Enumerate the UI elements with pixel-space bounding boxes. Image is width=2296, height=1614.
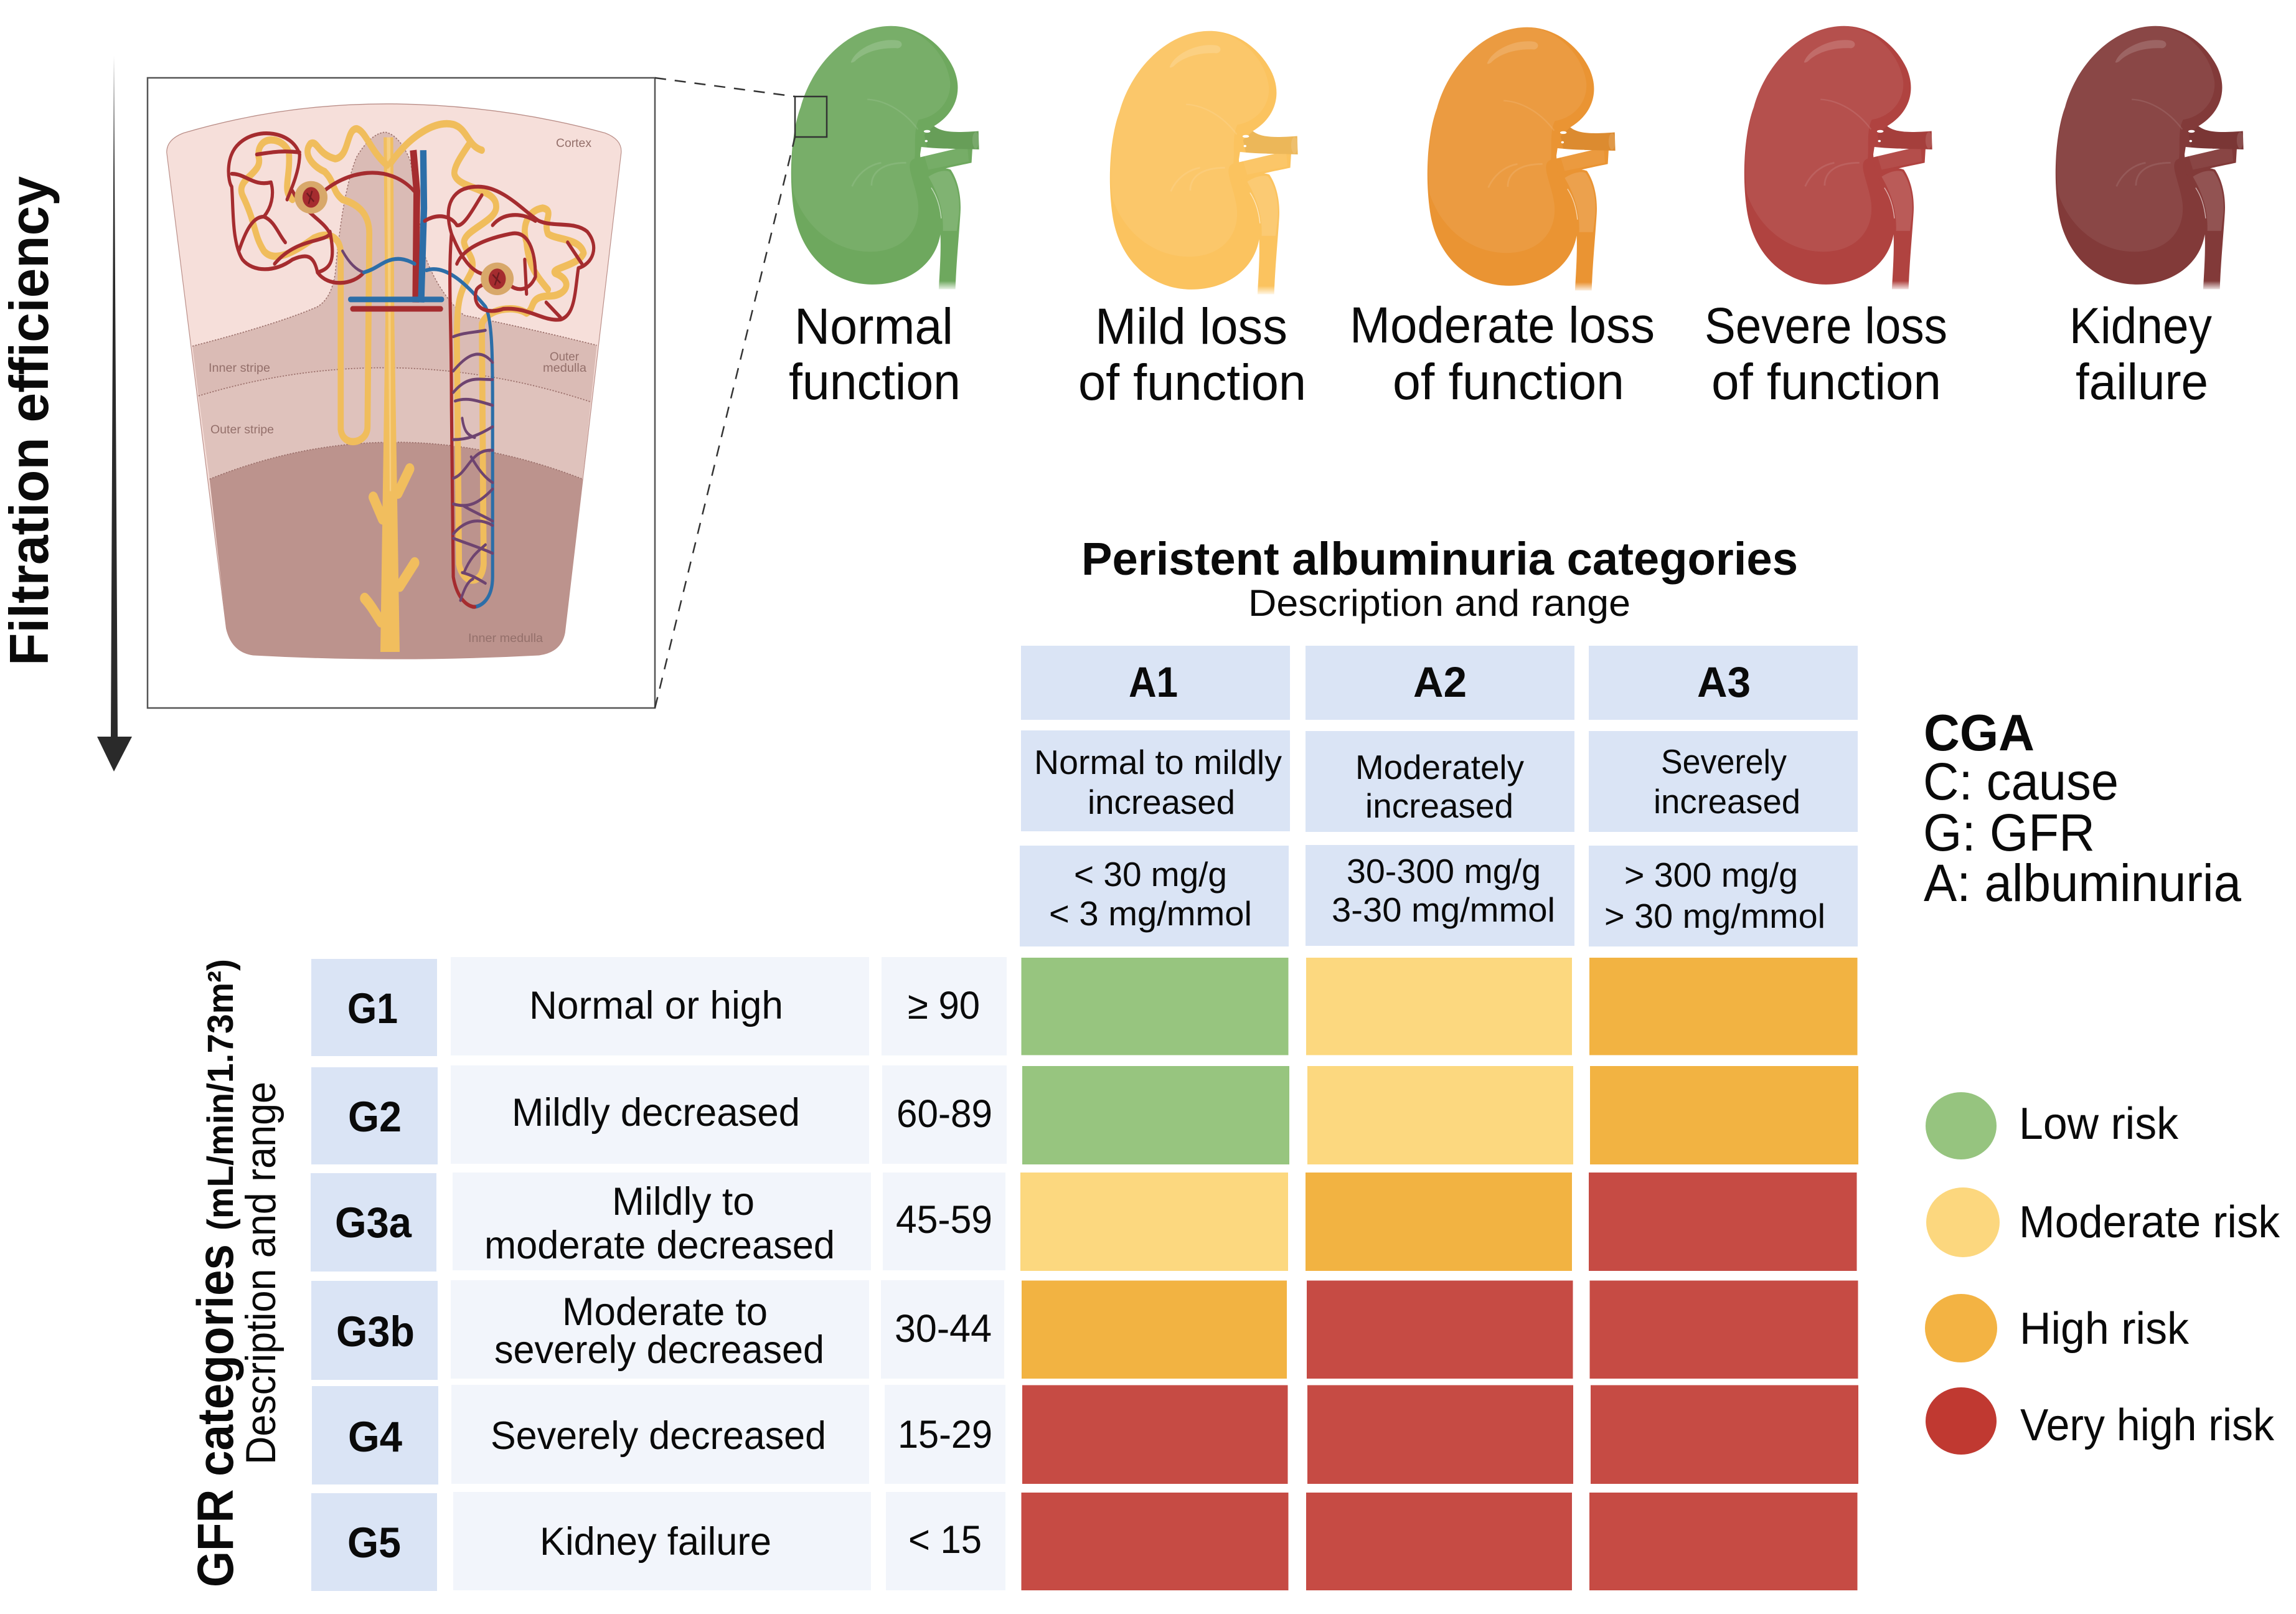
row G4: 15-29 <box>898 1413 992 1456</box>
column A3: > 300 mg/g <box>1624 856 1798 894</box>
row G3b: Moderate to <box>562 1290 768 1334</box>
legend: risk levels <box>1925 1092 2280 1455</box>
row G2 <box>311 1065 1007 1164</box>
GFR axis title: GFR categories <box>187 1244 244 1587</box>
row G3b: G3b <box>336 1308 415 1356</box>
row G2: 60-89 <box>896 1092 992 1136</box>
row G4: G4 <box>348 1413 402 1461</box>
kidney: kidney failure: Kidney <box>2069 298 2212 354</box>
row G5: G5 <box>347 1519 401 1567</box>
arrow: filtration efficiency decreasing downward <box>97 56 132 772</box>
zone labels: Inner stripe <box>209 362 270 375</box>
nephron illustration <box>167 104 621 659</box>
row G5 <box>311 1492 1005 1591</box>
kidney: moderate loss of function: of function <box>1393 354 1624 410</box>
heading: persistent albuminuria categories: Description and range <box>1248 582 1630 624</box>
column A2: Moderately <box>1355 748 1524 786</box>
legend item: low risk: Low risk <box>2019 1099 2179 1149</box>
legend item: high risk <box>1925 1294 2190 1362</box>
row G1: G1 <box>347 984 398 1032</box>
row G3a: G3a <box>335 1199 412 1247</box>
row G3a: 45-59 <box>896 1198 992 1242</box>
kidney: moderate loss of function: Moderate loss <box>1350 297 1655 354</box>
zone labels: Cortex <box>556 137 592 150</box>
legend item: moderate risk <box>1926 1187 2280 1257</box>
row G3b: severely decreased <box>494 1328 824 1372</box>
kidney: normal function <box>789 26 979 410</box>
row G1: ≥ 90 <box>908 984 980 1027</box>
row G2: Mildly decreased <box>512 1091 800 1135</box>
row G1: Normal or high <box>529 984 783 1027</box>
row G5: Kidney failure <box>540 1520 771 1564</box>
row G1 <box>311 957 1007 1056</box>
legend item: very high risk <box>1926 1387 2275 1455</box>
kidney: mild loss of function: Mild loss <box>1095 298 1287 355</box>
row G4: Severely decreased <box>491 1414 826 1458</box>
zone labels: medulla <box>543 362 586 375</box>
zoom marker on normal kidney <box>795 97 827 137</box>
row G5: < 15 <box>908 1518 982 1562</box>
column A2: 30-300 mg/g <box>1347 852 1541 890</box>
column A3: A3 <box>1697 658 1751 706</box>
row G3b: 30-44 <box>895 1307 992 1351</box>
kidney: mild loss of function <box>1078 31 1306 411</box>
legend item: high risk: High risk <box>2020 1304 2190 1354</box>
legend item: low risk <box>1926 1092 2179 1159</box>
legend item: very high risk: Very high risk <box>2020 1400 2275 1450</box>
kidney: severe loss of function <box>1705 26 1947 410</box>
kidney: normal function: function <box>789 354 961 410</box>
column A2: increased <box>1365 786 1513 825</box>
row G3b <box>311 1280 1004 1380</box>
column A3 <box>1589 646 1858 946</box>
risk matrix heat map <box>1020 958 1858 1590</box>
heading: persistent albuminuria categories <box>1081 533 1798 624</box>
column A3: > 30 mg/mmol <box>1604 897 1825 935</box>
CGA definition block: G: GFR <box>1923 803 2095 862</box>
zone labels <box>209 137 592 645</box>
column A2: A2 <box>1413 658 1467 706</box>
kidney: moderate loss of function <box>1350 27 1655 410</box>
zone labels: Outer stripe <box>210 423 274 437</box>
column A3: increased <box>1654 782 1800 821</box>
column A1: < 30 mg/g <box>1074 855 1227 894</box>
kidney: kidney failure <box>2056 26 2244 410</box>
kidney: severe loss of function: of function <box>1711 354 1941 410</box>
kidney: kidney failure: failure <box>2076 354 2208 410</box>
row G3a: moderate decreased <box>484 1224 835 1267</box>
kidney: severe loss of function: Severe loss <box>1705 298 1947 354</box>
column A1: < 3 mg/mmol <box>1049 894 1252 933</box>
row G3a <box>311 1173 1005 1272</box>
column A1: A1 <box>1129 658 1178 706</box>
column A1: Normal to mildly <box>1034 743 1282 781</box>
GFR axis title <box>187 959 285 1587</box>
zoom connector lines <box>655 78 795 708</box>
row G2: G2 <box>348 1093 402 1141</box>
column A3: Severely <box>1661 742 1787 781</box>
row G3a: Mildly to <box>612 1180 755 1224</box>
column A1: increased <box>1088 783 1235 821</box>
GFR axis title: Description and range <box>237 1082 285 1465</box>
inset frame <box>148 78 655 708</box>
column A1 <box>1020 646 1290 946</box>
zone labels: Inner medulla <box>468 632 543 645</box>
column A2: 3-30 mg/mmol <box>1332 890 1555 929</box>
GFR axis title: (mL/min/1.73m²) <box>200 959 241 1230</box>
albuminuria column headers <box>1020 646 1858 946</box>
kidney: mild loss of function: of function <box>1078 354 1306 411</box>
kidney: normal function: Normal <box>794 298 953 355</box>
CGA definition block: A: albuminuria <box>1924 854 2241 912</box>
column A2 <box>1306 646 1574 946</box>
legend item: moderate risk: Moderate risk <box>2019 1197 2280 1247</box>
panel: nephron inset <box>148 78 655 708</box>
CGA definition block <box>1923 704 2241 912</box>
GFR row labels <box>311 957 1007 1591</box>
row G4 <box>312 1385 1005 1484</box>
CGA definition block: CGA <box>1924 704 2035 762</box>
zone labels: Outer <box>550 351 580 364</box>
kidney row <box>789 26 2244 411</box>
heading: persistent albuminuria categories: Peristent albuminuria categories <box>1081 533 1798 585</box>
CGA definition block: C: cause <box>1923 752 2119 811</box>
